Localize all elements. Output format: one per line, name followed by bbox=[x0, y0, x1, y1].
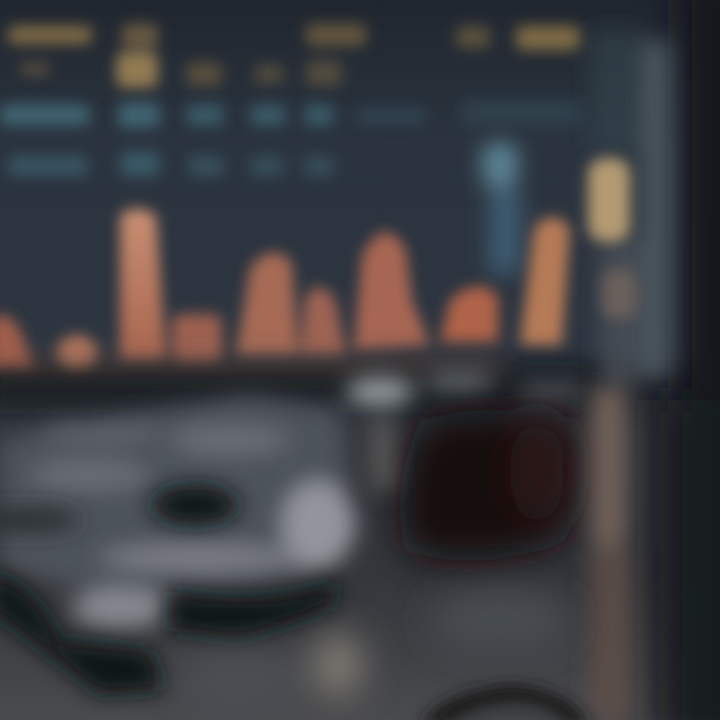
black shapes in lower left bbox=[0, 485, 340, 695]
orange bar chart bbox=[0, 158, 636, 371]
bar: small left bbox=[57, 335, 97, 371]
bar: mid bbox=[236, 252, 298, 355]
dark arc at bottom bbox=[420, 684, 590, 720]
bar: right low bbox=[440, 286, 498, 342]
lower gray objects bbox=[0, 370, 580, 628]
right dark column bbox=[650, 0, 720, 720]
bar: tallest bbox=[120, 208, 166, 360]
bar: lower mid bbox=[300, 287, 346, 355]
teal data rows bbox=[0, 100, 582, 176]
floor reflections bbox=[180, 590, 570, 710]
bar: low bbox=[172, 314, 222, 362]
orange reflection streak bbox=[372, 385, 632, 720]
bar: gold top bbox=[588, 158, 630, 242]
bar: right tall bbox=[520, 217, 570, 345]
dark sphere bbox=[400, 410, 583, 560]
bar: far left bbox=[0, 315, 34, 370]
blue vertical light bbox=[482, 30, 670, 390]
chart baseline band bbox=[0, 354, 590, 402]
bar: peak bbox=[354, 232, 430, 350]
gold heading blobs bbox=[8, 24, 580, 88]
